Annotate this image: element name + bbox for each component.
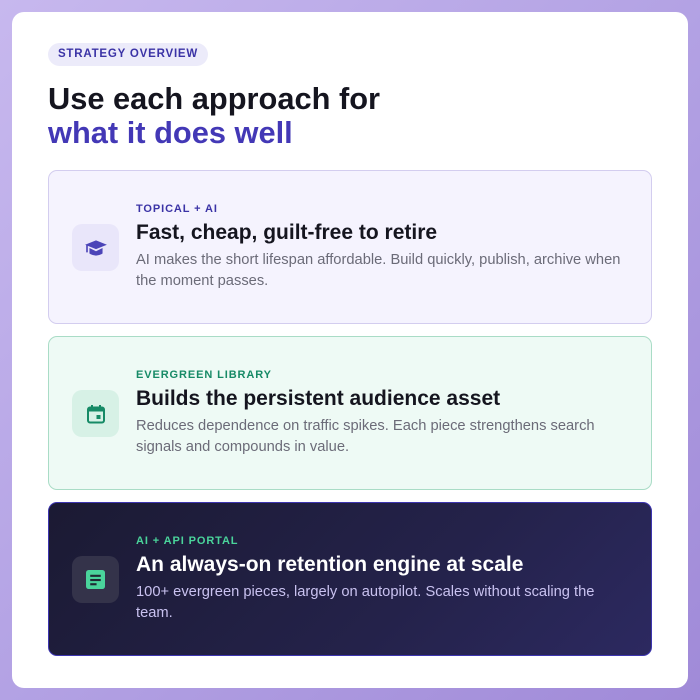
text: An always-on retention engine at scale	[136, 553, 523, 576]
panel: ai + api portal	[48, 502, 652, 656]
text	[136, 369, 595, 455]
title: what it does well	[48, 115, 293, 150]
text: AI makes the short lifespan affordable. Build quickly, publish, archive when the moment passes.	[136, 252, 620, 289]
badge: STRATEGY OVERVIEW	[58, 48, 198, 60]
icon: calendar	[72, 390, 119, 437]
text: Builds the persistent audience asset	[136, 387, 500, 410]
text: Fast, cheap, guilt-free to retire	[136, 221, 437, 244]
text: EVERGREEN LIBRARY	[136, 369, 272, 381]
text	[136, 535, 594, 621]
icon: graduation cap	[72, 224, 119, 271]
badge	[48, 43, 208, 66]
panel: topical + ai	[48, 170, 652, 324]
title: Use each approach for	[48, 81, 380, 116]
panel: evergreen	[48, 336, 652, 490]
icon: document	[72, 556, 119, 603]
text	[136, 203, 620, 289]
text: TOPICAL + AI	[136, 203, 218, 215]
title	[48, 81, 380, 150]
text: 100+ evergreen pieces, largely on autopilot. Scales without scaling the team.	[136, 584, 594, 621]
text: Reduces dependence on traffic spikes. Each piece strengthens search signals and compounds in value.	[136, 418, 595, 455]
text: AI + API PORTAL	[136, 535, 238, 547]
